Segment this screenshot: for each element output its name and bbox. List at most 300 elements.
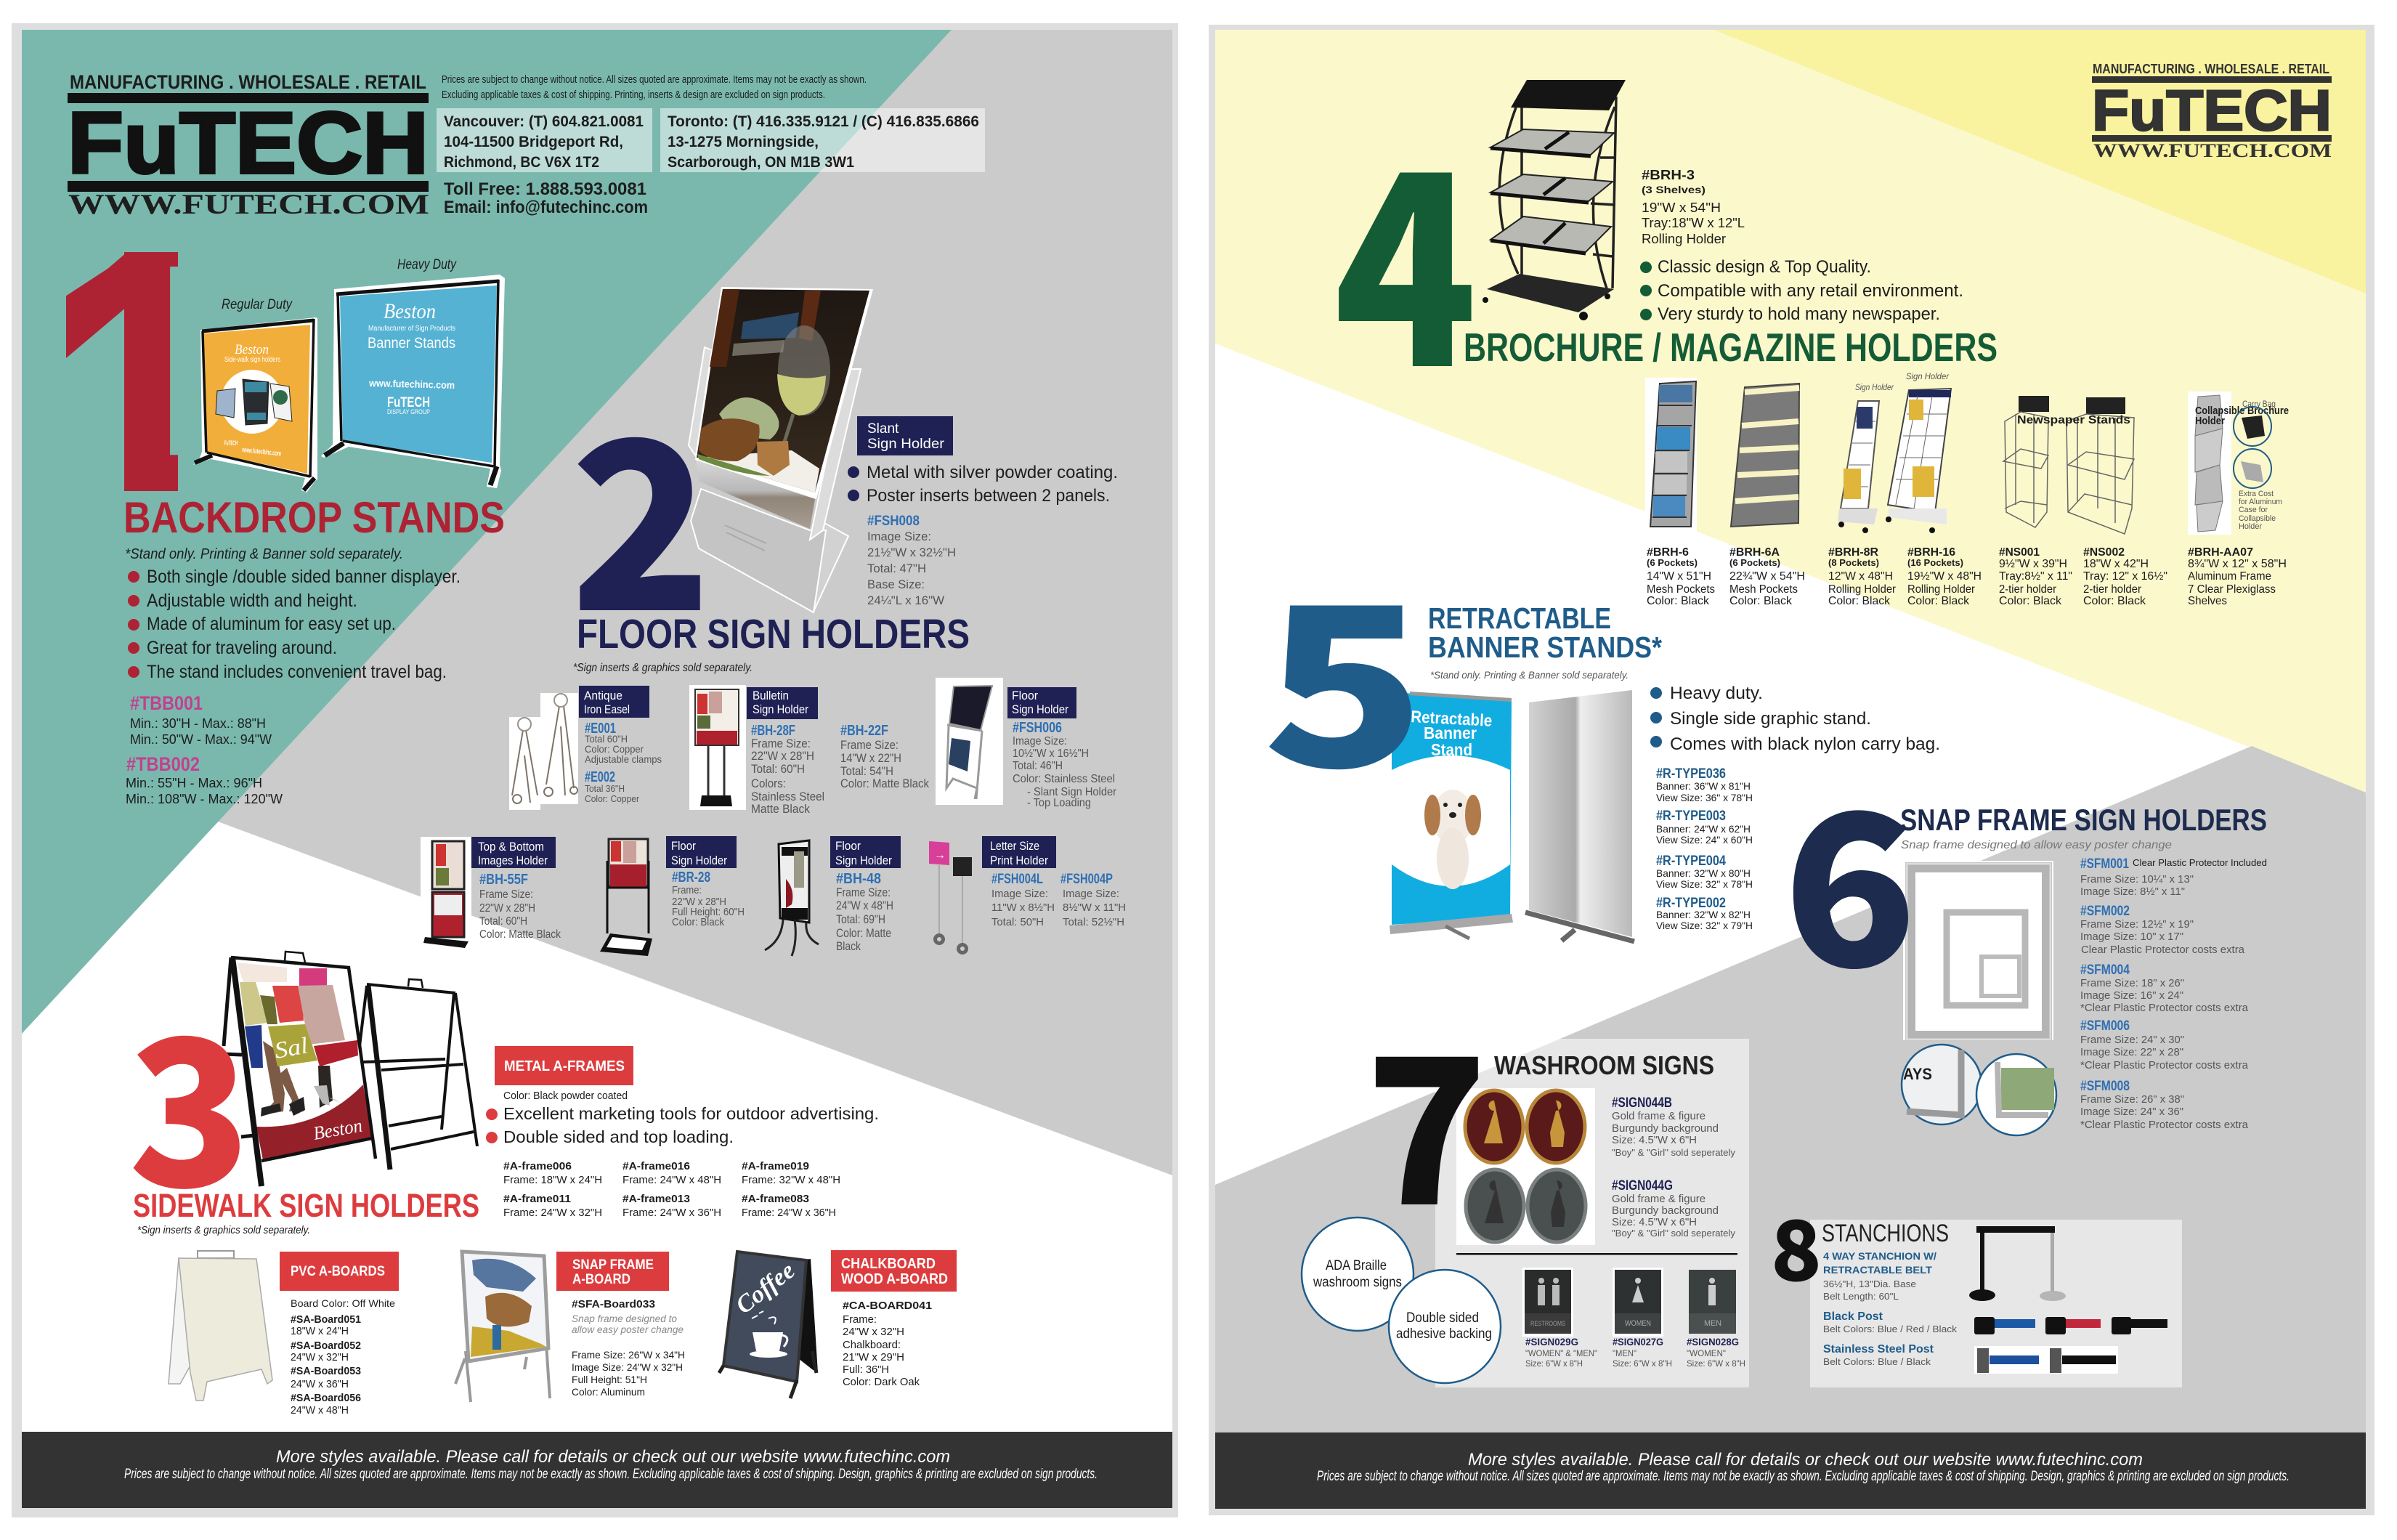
product: regular duty backdrop: Beston — [235, 342, 269, 357]
spec BH-55F: 22"W x 28"H — [479, 902, 535, 915]
spec BH-48: 24"W x 48"H — [836, 899, 893, 912]
spec row: brochure holders: Rolling Holder — [1828, 583, 1897, 596]
spec FSH004L and FSH004P: #FSH004P — [1060, 872, 1113, 887]
product: BRH-6 rack — [1645, 378, 1697, 532]
spec BRH-3: Rolling Holder — [1642, 232, 1726, 246]
spec retractable banners: Banner: 32"W x 82"H — [1656, 909, 1751, 920]
spec PVC boards: #SA-Board052 — [291, 1340, 361, 1352]
toll free and email — [444, 179, 648, 217]
right footer: More styles available. Please call for details or check out our website www.futechinc.com — [1468, 1450, 2143, 1470]
Vancouver address: Vancouver: (T) 604.821.0081 — [444, 113, 644, 130]
tag: top and bottom — [471, 837, 556, 868]
spec snap frames — [2080, 856, 2267, 1131]
section 2 bullets: Poster inserts between 2 panels. — [867, 486, 1110, 506]
product: regular duty backdrop: www.futechinc.com — [241, 446, 282, 458]
a-frame size list: Frame: 32"W x 48"H — [742, 1174, 840, 1186]
product: letter size print holders: → — [934, 849, 946, 862]
spec BH-48: Black — [836, 939, 861, 953]
section 2 note: *Sign inserts & graphics sold separately. — [573, 662, 753, 674]
caption: collapsible brochure holder — [2195, 399, 2289, 427]
spec BRH-3: #BRH-3 — [1642, 168, 1695, 182]
spec BH-28F — [751, 723, 824, 816]
spec FSH004L and FSH004P: #FSH004L — [991, 872, 1043, 887]
section 4 bullets: Very sturdy to hold many newspaper. — [1658, 304, 1940, 324]
spec FSH008: #FSH008 — [867, 514, 920, 529]
spec row: brochure holders: Color: Black — [2083, 595, 2146, 607]
tag: floor holder FSH006: Sign Holder — [1012, 702, 1068, 716]
spec row: brochure holders: 2-tier holder — [1999, 583, 2057, 596]
tag: BH-48: Sign Holder — [835, 854, 892, 867]
tag: snap frame a-board — [556, 1252, 669, 1291]
product: BH-48 floor sign — [765, 840, 819, 956]
section 6 subtitle: Snap frame designed to allow easy poster change — [1901, 839, 2172, 851]
left background: teal wedge — [22, 30, 952, 1034]
product: chalkboard a-board: Coffee — [731, 1257, 800, 1319]
product: iron easels — [509, 693, 578, 810]
tag: floor holder FSH006 — [1007, 687, 1076, 718]
section 3 bullets: Excellent marketing tools for outdoor advertising. — [503, 1104, 879, 1123]
callout: ADA braille — [1302, 1217, 1414, 1331]
right footer — [1215, 1432, 2366, 1509]
slant sign holder tag — [857, 416, 953, 455]
company logo: FuTECH — [68, 94, 429, 192]
product: BRH-AA07 collapsible holder — [2188, 392, 2231, 535]
spec row: brochure holders: #NS001 — [1999, 546, 2040, 559]
section 3 note: *Sign inserts & graphics sold separately. — [137, 1224, 310, 1236]
spec SIGN044B: Burgundy background — [1612, 1122, 1719, 1135]
spec row: brochure holders — [1647, 546, 2287, 607]
callout: double sided backing: adhesive backing — [1396, 1326, 1492, 1342]
spec PVC boards: Board Color: Off White — [291, 1297, 395, 1309]
spec snap frames: #SFM001 — [2080, 856, 2129, 872]
tag: snap frame a-board: A-BOARD — [572, 1272, 630, 1287]
spec chalkboard: Full: 36"H — [843, 1364, 889, 1376]
spec row: brochure holders: (8 Pockets) — [1828, 558, 1879, 568]
price disclaimer: Prices are subject to change without notice. All sizes quoted are approximate. Items may not be exactly as shown. — [442, 73, 867, 86]
icon: carry bag and aluminum case — [2234, 407, 2271, 488]
product: stanchion pair — [1969, 1226, 2066, 1301]
section 1 product codes: #TBB002 — [126, 753, 200, 775]
section 1 bullets: Great for traveling around. — [147, 638, 337, 658]
spec PVC boards: 18"W x 24"H — [291, 1325, 349, 1337]
spec FSH004L and FSH004P: 8½"W x 11"H — [1063, 901, 1126, 914]
note: extra cost: for Aluminum — [2239, 498, 2282, 506]
spec FSH008 — [867, 514, 956, 607]
price disclaimer: Excluding applicable taxes & cost of shipping. Printing, inserts & design are excluded on sign products. — [442, 89, 825, 101]
section 1 product codes — [126, 692, 283, 806]
spec SIGN044B: #SIGN044B — [1612, 1095, 1672, 1111]
spec row: brochure holders: 8¾"W x 12" x 58"H — [2188, 558, 2287, 570]
spec snap frames: Frame Size: 18" x 26" — [2080, 977, 2184, 989]
section 5 heading — [1428, 601, 1662, 664]
section 1 bullets: Made of aluminum for easy set up. — [147, 614, 396, 634]
stanchions heading: STANCHIONS — [1822, 1220, 1949, 1247]
section 1 number — [66, 252, 178, 491]
tag: antique iron easel: Iron Easel — [584, 702, 630, 716]
caption: collapsible brochure holder: Collapsible Brochure — [2195, 405, 2289, 417]
spec retractable banners: Banner: 36"W x 81"H — [1656, 780, 1751, 792]
Toronto address: Scarborough, ON M1B 3W1 — [668, 154, 854, 171]
right background: gray wedge — [1215, 746, 2366, 1509]
section 4 bullets: Classic design & Top Quality. — [1658, 257, 1871, 277]
spec SIGN029G — [1525, 1336, 1597, 1369]
spec easels: #E002 — [585, 769, 615, 785]
spec chalkboard: Frame: — [843, 1314, 877, 1326]
section 2 heading: FLOOR SIGN HOLDERS — [577, 611, 970, 657]
spec PVC boards — [291, 1297, 395, 1417]
spec retractable banners: #R-TYPE002 — [1656, 896, 1726, 911]
spec snap frames: Clear Plastic Protector costs extra — [2081, 944, 2245, 956]
tag: letter size print holder — [982, 836, 1056, 868]
section 3 number: 3 — [129, 950, 251, 1245]
tag: BH-48 — [830, 836, 901, 868]
spec BR-28: 22"W x 28"H — [672, 896, 726, 908]
product: snap frame a-board — [455, 1252, 550, 1402]
spec easels: #E001 — [585, 721, 616, 737]
tag: chalkboard wood a-board: WOOD A-BOARD — [841, 1271, 948, 1287]
spec row: brochure holders: 2-tier holder — [2083, 583, 2142, 596]
product: regular duty backdrop: Side-walk sign holders — [224, 356, 280, 364]
section 1 heading: BACKDROP STANDS — [123, 493, 505, 542]
spec FSH006 — [1013, 720, 1117, 809]
spec SIGN027G: #SIGN027G — [1613, 1336, 1663, 1348]
section 1 product codes: #TBB001 — [130, 692, 203, 714]
small logo: FuTECH — [2092, 78, 2332, 142]
spec FSH004L and FSH004P: Total: 52½"H — [1063, 916, 1124, 928]
tag: BR-28: Floor — [671, 839, 696, 853]
section 3 heading: SIDEWALK SIGN HOLDERS — [133, 1187, 479, 1224]
spec stanchion — [1823, 1250, 1936, 1302]
spec retractable banners: #R-TYPE004 — [1656, 854, 1726, 869]
tag: bulletin: Sign Holder — [753, 702, 808, 716]
spec retractable banners: View Size: 32" x 79"H — [1656, 920, 1753, 931]
a-frame size list: Frame: 24"W x 36"H — [742, 1207, 836, 1219]
small logo: MANUFACTURING . WHOLESALE . RETAIL — [2093, 62, 2329, 76]
product: heavy duty backdrop: Banner Stands — [368, 335, 455, 352]
section 1 note: *Stand only. Printing & Banner sold separately. — [125, 546, 403, 562]
spec SIGN029G: "WOMEN" & "MEN" — [1525, 1350, 1597, 1358]
tag: PVC a-boards — [280, 1252, 399, 1291]
product: nested snap frames — [1903, 861, 2053, 1040]
Vancouver address — [437, 108, 652, 172]
section 4 bullets — [1640, 257, 1963, 324]
section 2 bullets: Metal with silver powder coating. — [867, 463, 1118, 482]
icon: men plaque — [1689, 1270, 1736, 1334]
spec BH-55F: Color: Matte Black — [479, 928, 561, 941]
spec easels: Color: Copper — [585, 743, 644, 755]
spec row: brochure holders: #NS002 — [2083, 546, 2125, 559]
spec row: brochure holders: (6 Pockets) — [1729, 558, 1780, 568]
spec BH-28F: Frame Size: — [751, 737, 811, 750]
product: regular duty backdrop — [193, 297, 317, 493]
spec BR-28: #BR-28 — [672, 870, 710, 885]
spec row: brochure holders: (16 Pockets) — [1907, 558, 1963, 568]
section 1 product codes: Min.: 30"H - Max.: 88"H — [130, 716, 266, 731]
tag: chalkboard wood a-board: CHALKBOARD — [841, 1256, 936, 1272]
spec snap frames: #SFM002 — [2080, 904, 2130, 919]
spec row: brochure holders: Mesh Pockets — [1647, 583, 1715, 596]
spec easels — [585, 721, 662, 804]
icon: women plaque — [1613, 1268, 1663, 1337]
section 1 product codes: Min.: 50"W - Max.: 94"W — [130, 732, 272, 747]
spec retractable banners: View Size: 32" x 78"H — [1656, 878, 1753, 890]
spec row: brochure holders: 7 Clear Plexiglass — [2188, 583, 2276, 596]
tag: letter size print holder: Print Holder — [990, 854, 1048, 867]
spec easels: Color: Copper — [585, 793, 640, 804]
product: NS002 wire newspaper stand — [2067, 397, 2134, 534]
spec BH-48: Color: Matte — [836, 926, 891, 940]
spec retractable banners: Banner: 24"W x 62"H — [1656, 823, 1751, 835]
spec row: brochure holders: Color: Black — [1907, 595, 1970, 607]
spec SIGN044B — [1612, 1095, 1735, 1158]
tag: letter size print holder: Letter Size — [990, 839, 1039, 853]
toll free and email: Toll Free: 1.888.593.0081 — [444, 179, 646, 199]
spec row: brochure holders: 18"W x 42"H — [2083, 558, 2149, 570]
spec FSH008: 21½"W x 32½"H — [867, 546, 956, 559]
callout: ADA braille: ADA Braille — [1326, 1258, 1387, 1273]
spec SIGN028G: "WOMEN" — [1687, 1350, 1726, 1358]
a-frame size list: #A-frame013 — [622, 1193, 690, 1205]
section 3 bullets — [486, 1104, 879, 1146]
product: retractable banner stand: Stand — [1431, 740, 1472, 759]
spec retractable banners: #R-TYPE003 — [1656, 808, 1726, 824]
spec stanchion: 36½"H, 13"Dia. Base — [1823, 1278, 1916, 1289]
right page white sheet — [1215, 30, 2366, 1509]
spec chalkboard: #CA-BOARD041 — [843, 1300, 932, 1312]
spec stainless post — [1823, 1343, 1934, 1367]
right background: strong yellow wedge — [1714, 30, 2366, 293]
product: heavy duty backdrop: Manufacturer of Sign Products — [368, 325, 455, 333]
product: stainless post belts — [1974, 1346, 2118, 1374]
spec chalkboard: Color: Dark Oak — [843, 1377, 920, 1388]
spec row: brochure holders: Color: Black — [1999, 595, 2062, 607]
tag: PVC a-boards: PVC A-BOARDS — [291, 1264, 385, 1279]
product: floor frame BR-28 — [600, 839, 652, 956]
product: heavy duty backdrop: FuTECH — [387, 395, 430, 410]
spec SIGN044B: "Boy" & "Girl" sold seperately — [1612, 1147, 1735, 1158]
spec row: brochure holders: 9½"W x 39"H — [1999, 558, 2067, 570]
caption: collapsible brochure holder: Holder — [2195, 415, 2225, 427]
product: retractable banner stand: Banner — [1424, 724, 1477, 742]
spec PVC boards: #SA-Board051 — [291, 1313, 361, 1326]
spec BRH-3 — [1642, 168, 1745, 246]
spec row: brochure holders: Color: Black — [1828, 595, 1891, 607]
spec snap frames: Image Size: 16" x 24" — [2080, 989, 2183, 1002]
a-frame size list: Frame: 24"W x 36"H — [622, 1207, 721, 1219]
spec BH-28F: #BH-28F — [751, 723, 795, 739]
section 6 heading: SNAP FRAME SIGN HOLDERS — [1900, 803, 2267, 837]
Toronto address: Toronto: (T) 416.335.9121 / (C) 416.835.6866 — [668, 113, 979, 130]
spec BR-28: Full Height: 60"H — [672, 906, 745, 918]
spec BH-48: #BH-48 — [836, 871, 881, 887]
spec BH-48: Frame Size: — [836, 885, 891, 899]
icon: restroom plaque — [1522, 1268, 1573, 1337]
spec snap frame board: Image Size: 24"W x 32"H — [572, 1361, 683, 1373]
tag: snap frame a-board: SNAP FRAME — [572, 1257, 654, 1273]
product: metal A-frame with poster — [224, 952, 376, 1186]
spec SIGN044G: "Boy" & "Girl" sold seperately — [1612, 1228, 1735, 1239]
product: black post belts — [1974, 1317, 2167, 1334]
spec snap frames: #SFM008 — [2080, 1079, 2130, 1094]
product: metal A-frame with poster: Sal — [272, 1032, 310, 1063]
a-frame size list: #A-frame011 — [503, 1193, 571, 1205]
spec SIGN044G: Burgundy background — [1612, 1204, 1719, 1217]
product: PVC a-board — [169, 1251, 272, 1401]
spec row: brochure holders: Tray: 12" x 16½" — [2083, 570, 2167, 583]
spec SIGN044B: Size: 4.5"W x 6"H — [1612, 1134, 1697, 1146]
spec FSH004L and FSH004P — [991, 872, 1126, 928]
spec FSH004L and FSH004P: 11"W x 8½"H — [991, 901, 1055, 914]
product: letter size print holders — [929, 841, 972, 955]
spec SIGN044B: Gold frame & figure — [1612, 1110, 1706, 1122]
spec BRH-3: Tray:18"W x 12"L — [1642, 216, 1745, 230]
product: slant sign holder photo — [689, 287, 873, 612]
spec row: brochure holders: Shelves — [2188, 595, 2227, 607]
Vancouver address: 104-11500 Bridgeport Rd, — [444, 134, 623, 150]
tag: metal a-frames: METAL A-FRAMES — [504, 1058, 625, 1074]
product: NS001 wire newspaper stand — [2003, 396, 2049, 527]
small logo — [2092, 62, 2332, 161]
spec FSH008: Total: 47"H — [867, 562, 926, 575]
tag: chalkboard wood a-board — [831, 1250, 957, 1292]
spec BH-28F: 22"W x 28"H — [751, 749, 814, 763]
section 4 bullets: Compatible with any retail environment. — [1658, 281, 1963, 301]
left footer: More styles available. Please call for details or check out our website www.futechinc.com — [276, 1447, 950, 1467]
spec SIGN029G: #SIGN029G — [1525, 1336, 1578, 1348]
spec BH-55F: Total: 60"H — [479, 915, 527, 928]
spec SIGN044G: Gold frame & figure — [1612, 1193, 1706, 1205]
Vancouver address: Richmond, BC V6X 1T2 — [444, 154, 599, 171]
spec BRH-3: 19"W x 54"H — [1642, 200, 1721, 215]
spec black post: Black Post — [1823, 1310, 1883, 1323]
sign holder captions: Sign Holder — [1906, 371, 1950, 381]
spec row: brochure holders: (6 Pockets) — [1647, 558, 1698, 568]
spec FSH006: - Slant Sign Holder — [1027, 786, 1117, 798]
left page white sheet — [22, 30, 1172, 1508]
a-frame size list: #A-frame016 — [622, 1160, 690, 1172]
product: top and bottom images holder — [421, 837, 471, 948]
product: regular duty backdrop: Regular Duty — [222, 297, 293, 312]
spec BH-22F: Frame Size: — [840, 738, 899, 752]
callout: double sided backing — [1389, 1270, 1501, 1383]
spec snap frames: #SFM006 — [2080, 1018, 2130, 1034]
slant sign holder tag: Sign Holder — [867, 437, 945, 452]
spec BH-22F: #BH-22F — [840, 723, 888, 739]
note: extra cost: Holder — [2239, 522, 2262, 531]
spec chalkboard: Chalkboard: — [843, 1340, 901, 1351]
tag: top and bottom: Top & Bottom — [478, 840, 544, 854]
section 5 bullets: Single side graphic stand. — [1670, 709, 1871, 729]
section 5 bullets — [1650, 684, 1940, 754]
company logo: MANUFACTURING . WHOLESALE . RETAIL — [70, 71, 426, 93]
company logo: WWW.FUTECH.COM — [68, 189, 429, 220]
spec snap frames: Image Size: 22" x 28" — [2080, 1046, 2183, 1058]
a-frame size list: #A-frame083 — [742, 1193, 809, 1205]
section 6 number: 6 — [1783, 722, 1917, 1027]
spec row: brochure holders: #BRH-6A — [1729, 546, 1780, 559]
section 4 heading: BROCHURE / MAGAZINE HOLDERS — [1464, 325, 1998, 370]
spec FSH006: - Top Loading — [1027, 797, 1091, 809]
spec BR-28 — [672, 870, 745, 928]
spec easels: Total 36"H — [585, 783, 625, 794]
a-frame size list: Frame: 18"W x 24"H — [503, 1174, 602, 1186]
product: retractable banner stand — [1390, 692, 1513, 939]
spec row: brochure holders: #BRH-8R — [1828, 546, 1878, 559]
spec row: brochure holders: Color: Black — [1729, 595, 1793, 607]
product: BRH-6A rack — [1731, 384, 1799, 527]
section 5 bullets: Heavy duty. — [1670, 684, 1763, 703]
tag: metal a-frames — [495, 1046, 633, 1085]
left footer: Prices are subject to change without notice. All sizes quoted are approximate. Items may not be exactly as shown. Excluding applicable taxes & cost of shipping. Design, graphics & printing are excluded on sign products. — [124, 1467, 1098, 1482]
product: heavy duty backdrop: Heavy Duty — [397, 257, 457, 272]
right background: pale yellow wedge — [1215, 30, 2366, 793]
spec row: brochure holders: Color: Black — [1647, 595, 1710, 607]
spec PVC boards: 24"W x 32"H — [291, 1351, 349, 1363]
spec row: brochure holders: #BRH-6 — [1647, 546, 1689, 559]
left footer — [22, 1432, 1172, 1508]
product: silver banner stand — [1525, 690, 1634, 941]
section 1 bullets: The stand includes convenient travel bag. — [147, 662, 447, 682]
product: metal A-frame with poster: Beston — [312, 1115, 364, 1144]
spec BH-28F: Colors: — [751, 777, 786, 790]
Toronto address — [660, 108, 985, 172]
callout: double sided backing: Double sided — [1406, 1310, 1479, 1326]
spec PVC boards: #SA-Board053 — [291, 1365, 361, 1377]
a-frame size list: Frame: 24"W x 32"H — [503, 1207, 602, 1219]
a-frame size list: #A-frame006 — [503, 1160, 572, 1172]
section 5 note: *Stand only. Printing & Banner sold separately. — [1430, 669, 1629, 681]
spec FSH006: Image Size: — [1013, 735, 1067, 747]
left background: gray wedge — [218, 30, 1172, 1175]
section 1 bullets: Adjustable width and height. — [147, 591, 357, 611]
spec PVC boards: #SA-Board056 — [291, 1392, 361, 1404]
product: heavy duty backdrop: DISPLAY GROUP — [387, 408, 430, 416]
toll free and email: Email: info@futechinc.com — [444, 198, 648, 217]
spec retractable banners: Banner: 32"W x 80"H — [1656, 867, 1751, 879]
product: regular duty backdrop: FuTECH — [224, 439, 238, 447]
spec BR-28: Color: Black — [672, 916, 724, 928]
spec snap frame board: #SFA-Board033 — [572, 1298, 655, 1310]
spec FSH008: Image Size: — [867, 530, 931, 543]
detail circles: frame corners: AYS — [1903, 1065, 1932, 1083]
tag: bulletin — [747, 687, 818, 719]
section 2 number: 2 — [570, 339, 712, 678]
spec SIGN027G: Size: 6"W x 8"H — [1613, 1360, 1672, 1369]
product: BRH-8R rolling rack — [1838, 401, 1879, 533]
spec BH-28F: Stainless Steel — [751, 790, 824, 803]
company logo — [68, 71, 429, 220]
caption: newspaper stands: Newspaper Stands — [2017, 414, 2130, 426]
section 7 number: 7 — [1366, 968, 1488, 1263]
spec row: brochure holders: Aluminum Frame — [2188, 570, 2271, 583]
spec FSH004L and FSH004P: Total: 50"H — [991, 916, 1044, 928]
note: extra cost: Collapsible — [2239, 514, 2276, 523]
tag: floor holder FSH006: Floor — [1012, 689, 1038, 702]
note: extra cost: Extra Cost — [2239, 490, 2274, 498]
tag: BR-28 — [666, 836, 737, 868]
tag: antique iron easel — [579, 686, 649, 718]
sign holder captions — [1855, 371, 1950, 392]
tag: BH-48: Floor — [835, 839, 861, 853]
spec SIGN044G: #SIGN044G — [1612, 1178, 1673, 1194]
spec row: brochure holders: Mesh Pockets — [1729, 583, 1798, 596]
product: BRH-16 rolling rack — [1886, 389, 1951, 533]
spec stainless post: Belt Colors: Blue / Black — [1823, 1356, 1931, 1367]
spec SIGN028G: Size: 6"W x 8"H — [1687, 1360, 1745, 1369]
spec SIGN027G: "MEN" — [1613, 1350, 1636, 1358]
section 8 number: 8 — [1771, 1185, 1822, 1305]
small logo: WWW.FUTECH.COM — [2093, 140, 2332, 161]
